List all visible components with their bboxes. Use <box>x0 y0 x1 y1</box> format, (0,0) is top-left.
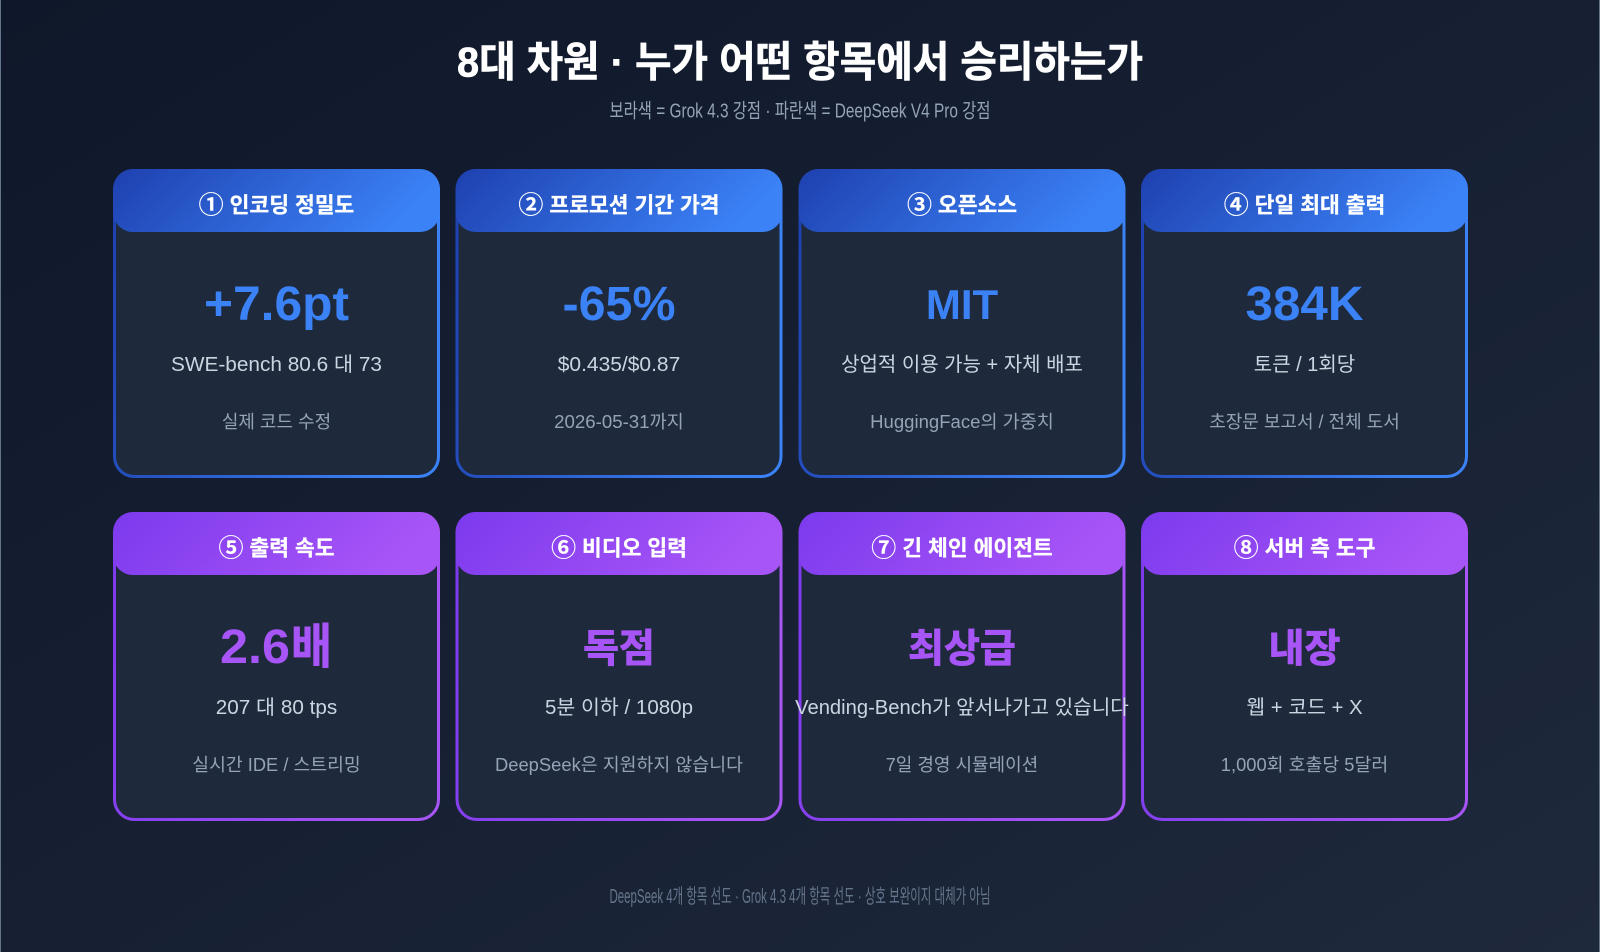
header: open source <box>798 169 1126 232</box>
value: -65%: -65% <box>562 278 676 331</box>
value: exclusive: 독점 <box>583 628 655 671</box>
header: max output: 단일 최대 출력 <box>1249 194 1385 218</box>
header: server-side tools: 서버 측 도구 <box>1259 536 1375 560</box>
note: simulation: 7일 경영 시뮬레이션 <box>886 755 1038 775</box>
note: DeepSeek unsupported: DeepSeek은 지원하지 않습니다 <box>495 755 743 775</box>
value: 2.6x: 배 <box>291 621 332 674</box>
header: video input: 비디오 입력 <box>576 536 687 560</box>
detail: price: $0.435/$0.87 <box>558 354 680 376</box>
subtitle: 보라색 = Grok 4.3 강점 · 파란색 = DeepSeek V4 Pro 강점 <box>610 100 990 122</box>
detail: tokens per call: 토큰 / 1회당 <box>1254 353 1355 376</box>
title: 8대 차원 · 누가 어떤 항목에서 승리하는가 <box>457 38 1143 86</box>
header: promotional price: 프로모션 기간 가격 <box>543 194 720 218</box>
header: open source: ③ <box>907 192 932 220</box>
value: 2.6x: 2.6 <box>220 621 290 674</box>
value: top tier: 최상급 <box>908 628 1016 671</box>
panel: encoding precision <box>113 169 440 476</box>
value: built-in: 내장 <box>1269 628 1340 671</box>
header: server-side tools: ⑧ <box>1234 534 1259 562</box>
panel: server-side tools <box>1141 512 1468 820</box>
header: output speed: 출력 속도 <box>243 536 335 560</box>
header: long chain agents: 긴 체인 에이전트 <box>896 536 1053 560</box>
header: encoding precision <box>113 169 440 232</box>
detail: Vending-Bench: Vending-Bench가 앞서나가고 있습니다 <box>795 696 1129 719</box>
header: promotional price <box>456 169 782 232</box>
header: encoding precision: ① <box>199 192 224 220</box>
panel: promotional price <box>456 169 782 476</box>
header: video input: ⑥ <box>551 534 576 562</box>
header: long chain agents: ⑦ <box>871 534 896 562</box>
panel: open source <box>798 169 1126 476</box>
detail: tools: 웹 + 코드 + X <box>1246 696 1363 719</box>
note: until date: 2026-05-31까지 <box>554 412 684 432</box>
header: max output <box>1141 169 1468 232</box>
header: video input <box>456 512 782 575</box>
panel: video input <box>456 512 782 820</box>
header: output speed: ⑤ <box>218 534 243 562</box>
header: server-side tools <box>1141 512 1468 575</box>
note: pricing: 1,000회 호출당 5달러 <box>1221 755 1388 775</box>
value: 2.6x <box>220 621 332 674</box>
panel: max output <box>1141 169 1468 476</box>
note: real code fixes: 실제 코드 수정 <box>222 412 331 432</box>
detail: SWE-bench: SWE-bench 80.6 대 73 <box>171 353 382 376</box>
header: promotional price: ② <box>518 192 543 220</box>
value: +7.6pt: +7.6pt <box>204 278 349 331</box>
note: long reports: 초장문 보고서 / 전체 도서 <box>1209 412 1400 432</box>
header: output speed <box>113 512 440 575</box>
note: weights: HuggingFace의 가중치 <box>870 412 1054 432</box>
header: long chain agents <box>798 512 1126 575</box>
value: 384K: 384K <box>1246 278 1364 331</box>
footer note: DeepSeek 4개 항목 선도 · Grok 4.3 4개 항목 선도 · 상호 보완이지 대체가 아님 <box>610 885 990 908</box>
panel: output speed <box>113 512 440 820</box>
header: encoding precision: 인코딩 정밀도 <box>224 194 354 218</box>
detail: tps: 207 대 80 tps <box>216 696 337 719</box>
detail: video limits: 5분 이하 / 1080p <box>545 696 693 719</box>
header: max output: ④ <box>1224 192 1249 220</box>
detail: commercial use: 상업적 이용 가능 + 자체 배포 <box>841 353 1083 376</box>
value: MIT: MIT <box>926 281 998 328</box>
header: open source: 오픈소스 <box>932 194 1017 218</box>
note: realtime: 실시간 IDE / 스트리밍 <box>192 755 361 775</box>
panel: long chain agents <box>795 512 1129 820</box>
